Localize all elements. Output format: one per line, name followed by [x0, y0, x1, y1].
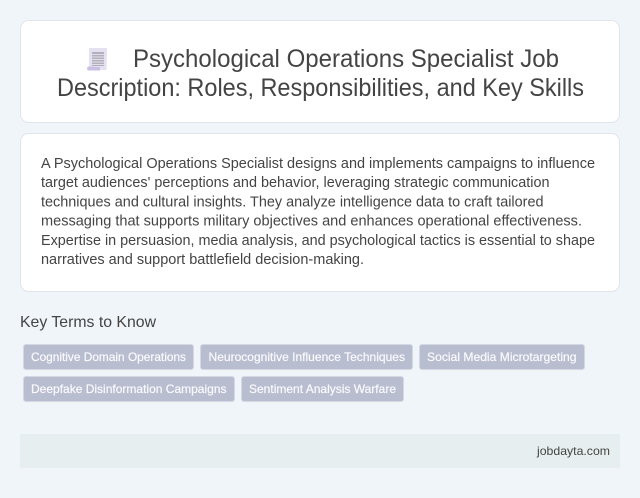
tag: Social Media Microtargeting [427, 350, 576, 364]
description text: A Psychological Operations Specialist designs and implements campaigns to influence [41, 156, 595, 172]
title: Description: Roles, Responsibilities, and Key Skills [57, 74, 584, 102]
description text: target audiences' perceptions and behavior, leveraging strategic communication [41, 175, 550, 191]
heading: key terms: Key Terms to Know [20, 314, 156, 331]
panel: title card [20, 20, 620, 122]
description text [41, 156, 595, 268]
icon: document scroll [87, 48, 107, 70]
description text: messaging that supports military objectives and enhances operational effectiveness. [41, 214, 582, 230]
title [57, 45, 584, 102]
title: Psychological Operations Specialist Job [133, 45, 559, 73]
tag [242, 376, 404, 402]
tags [24, 344, 584, 402]
footer: jobdayta.com [536, 444, 610, 458]
tag: Sentiment Analysis Warfare [249, 382, 396, 396]
footer [20, 434, 620, 468]
tag [200, 344, 412, 370]
description text: techniques and cultural insights. They analyze intelligence data to craft tailored [41, 194, 544, 210]
tag: Neurocognitive Influence Techniques [208, 350, 405, 364]
description text: Expertise in persuasion, media analysis, and psychological tactics is essential to shape [41, 233, 595, 249]
panel: description [20, 134, 620, 292]
tag: Deepfake Disinformation Campaigns [31, 382, 227, 396]
description text: narratives and support battlefield decision-making. [41, 252, 364, 268]
tag [420, 344, 584, 370]
tag [24, 376, 234, 402]
tag [24, 344, 194, 370]
tag: Cognitive Domain Operations [31, 350, 186, 364]
